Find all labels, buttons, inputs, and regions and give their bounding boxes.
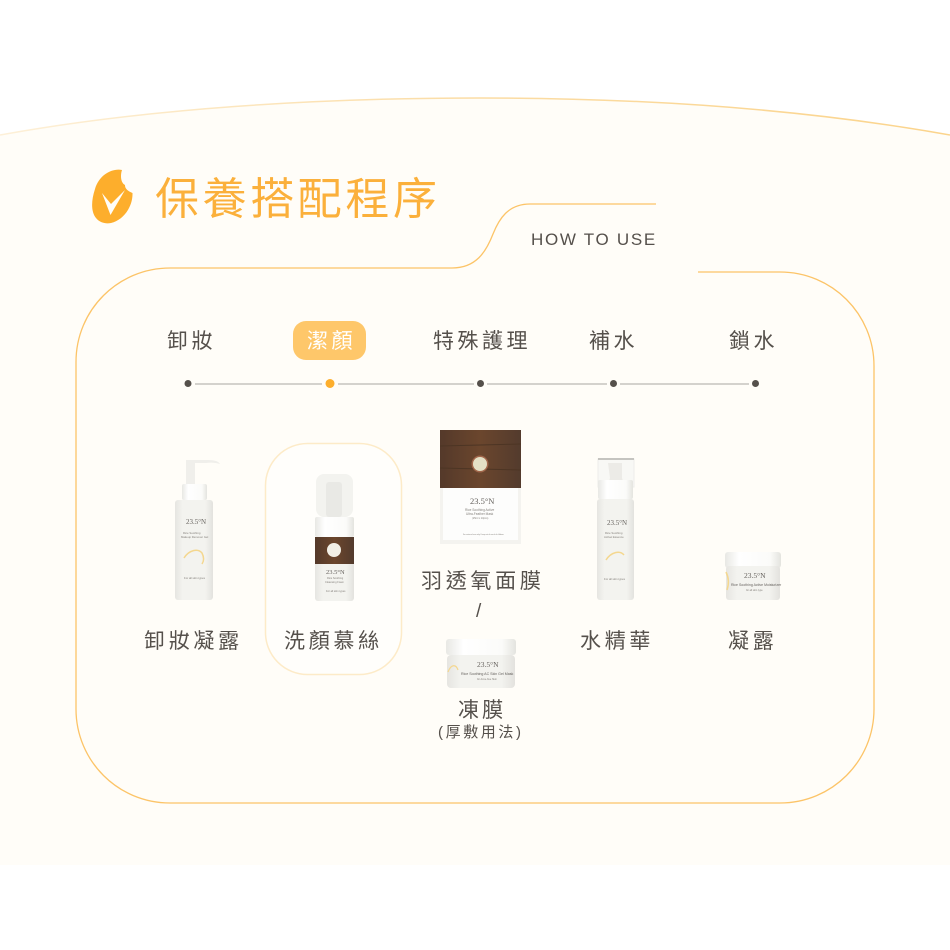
icon: rice grain with check <box>92 170 133 223</box>
product: ultra-feather sheet mask: Ultra-Feather Mask <box>466 512 494 516</box>
product: essence bottle: For all skin types <box>604 577 626 581</box>
product: ultra-feather sheet mask: (25ml x 10pcs) <box>472 517 489 520</box>
product: gel mask jar: 23.5°N <box>477 660 499 669</box>
product: makeup removal gel bottle: For all skin types <box>184 576 206 580</box>
product: ultra-feather sheet mask: 23.5°N <box>470 496 494 506</box>
label: slash separator: / <box>476 601 482 622</box>
product: gel mask jar: Rice Soothing AC Skin Gel Mask <box>461 672 514 676</box>
step: hydrate: 補水 <box>589 330 638 353</box>
step: special care: 特殊護理 <box>433 330 531 353</box>
highlight card: cleansing mousse <box>266 444 402 674</box>
product: essence bottle: Activel Essence <box>604 535 624 539</box>
step: cleanse highlighted <box>293 321 366 360</box>
product: cleansing mousse pump bottle: Rice Soothing <box>327 576 344 580</box>
product: moisturizer jar: Rice Soothing Active Moisturizer <box>731 583 782 587</box>
label: ultra-feather oxygen mask: 羽透氧面膜 <box>421 570 544 593</box>
product: makeup removal gel bottle: Rice Soothing <box>183 531 201 535</box>
label: essence: 水精華 <box>580 630 654 653</box>
product: essence bottle <box>597 458 634 600</box>
product: gel mask jar <box>446 639 516 688</box>
product: essence bottle: Rice Soothing <box>605 531 623 535</box>
product: cleansing mousse pump bottle <box>315 474 354 601</box>
label: thick application note: (厚敷用法) <box>438 723 524 741</box>
main rounded frame <box>76 204 874 803</box>
step: makeup removal: 卸妝 <box>167 330 216 353</box>
label: moisturizer gel: 凝露 <box>728 630 777 653</box>
title: 保養搭配程序 <box>155 175 441 224</box>
product: makeup removal gel bottle: 23.5°N <box>186 518 206 526</box>
label: cleansing mousse: 洗顏慕絲 <box>284 630 383 653</box>
label: gel mask: 凍膜 <box>458 699 506 722</box>
product: ultra-feather sheet mask <box>440 430 521 544</box>
step labels <box>167 321 778 360</box>
product: essence bottle: 23.5°N <box>607 519 627 527</box>
product: makeup removal gel bottle <box>175 460 220 600</box>
product: ultra-feather sheet mask: Rice Soothing Active <box>465 508 494 512</box>
step: cleanse highlighted: 潔顏 <box>307 330 356 353</box>
product: moisturizer jar: 23.5°N <box>744 571 766 580</box>
label: makeup remover gel: 卸妝凝露 <box>144 630 243 653</box>
top arc line <box>0 98 950 135</box>
product: cleansing mousse pump bottle: For all skin types <box>326 589 346 593</box>
product: cleansing mousse pump bottle: Cleansing Foam <box>325 580 344 584</box>
product: ultra-feather sheet mask: For external use only. Keep out of reach of children. <box>463 533 505 536</box>
product: gel mask jar: for Acne-free Skin <box>477 678 497 681</box>
product: moisturizer jar: for all skin type <box>746 589 763 592</box>
step: lock moisture: 鎖水 <box>729 330 778 353</box>
product: makeup removal gel bottle: Makeup Remover Gel <box>181 535 209 539</box>
subtitle: how to use: HOW TO USE <box>531 230 657 249</box>
product: cleansing mousse pump bottle: 23.5°N <box>326 569 345 576</box>
product: moisturizer jar <box>725 552 782 600</box>
timeline <box>184 379 759 388</box>
